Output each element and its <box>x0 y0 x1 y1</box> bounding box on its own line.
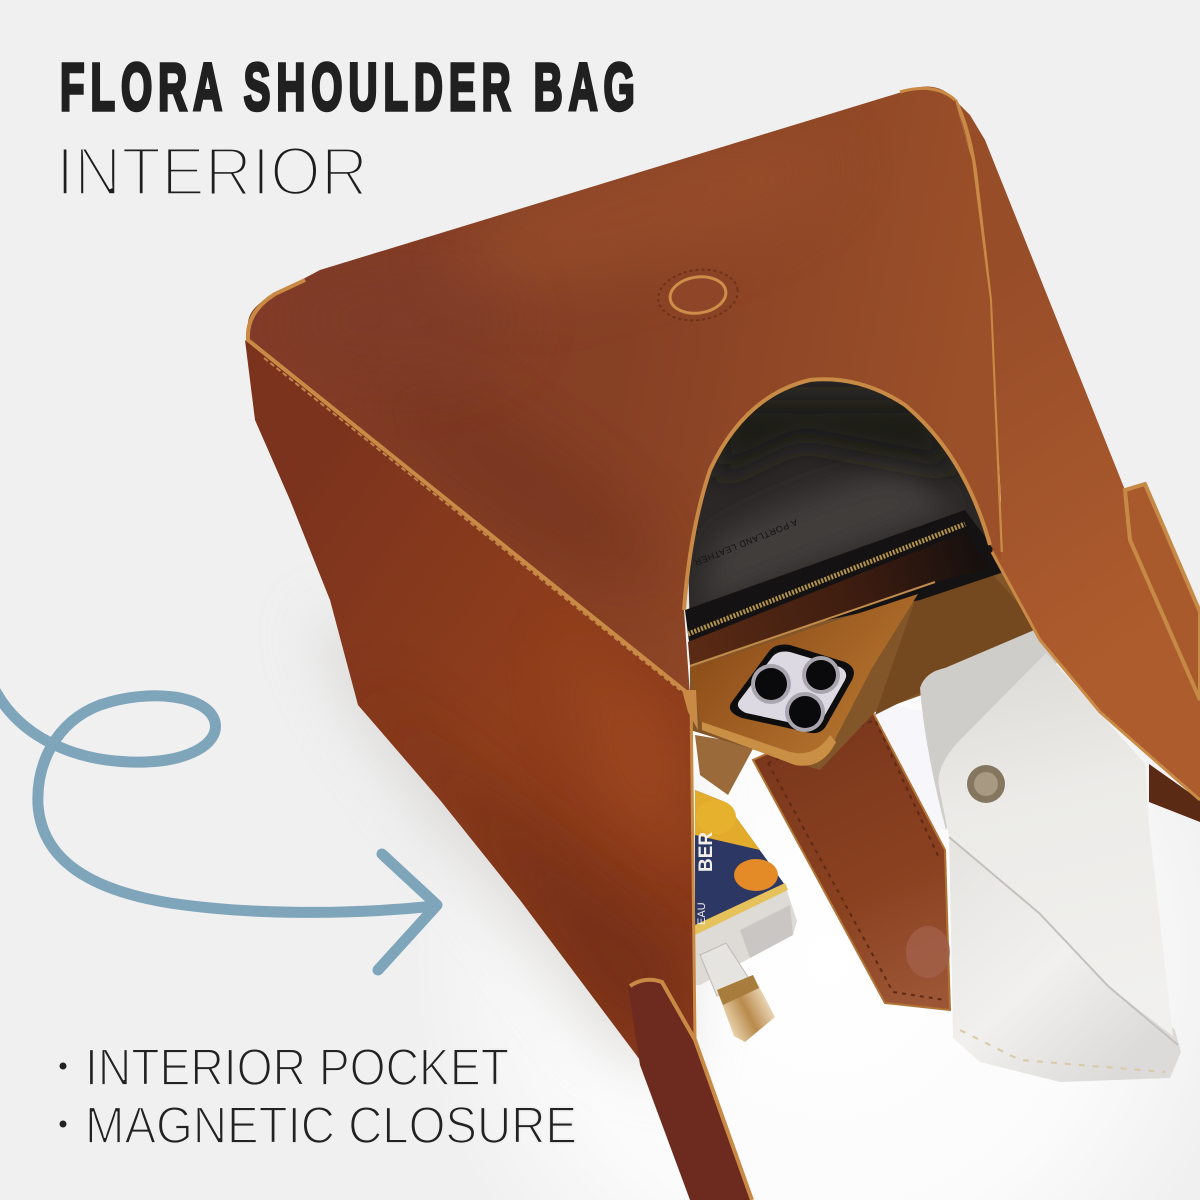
feature list <box>60 1039 577 1155</box>
shaded lining at right <box>875 565 1045 715</box>
pouch stitching <box>960 1030 1165 1072</box>
pouch front flap <box>938 653 1173 1036</box>
left lower panel <box>245 340 696 1060</box>
pouch lower body <box>949 830 1181 1082</box>
tan lining <box>690 500 1045 770</box>
bottle neck <box>700 943 750 996</box>
bottle glass <box>695 885 797 985</box>
lower strap <box>628 979 752 1200</box>
bullet: magnetic closure: MAGNETIC CLOSURE <box>85 1097 577 1155</box>
top front panel with arch opening <box>248 86 1001 730</box>
bullet: interior pocket: INTERIOR POCKET <box>85 1039 509 1097</box>
magnet bump <box>906 926 950 978</box>
dark deep shadow <box>685 510 1010 650</box>
white paper card <box>872 700 950 830</box>
floor highlight <box>330 560 1200 1200</box>
zipper <box>688 524 965 634</box>
interior of bag <box>684 370 1045 770</box>
corner knot <box>682 690 698 730</box>
snap button <box>967 765 1005 803</box>
top panel edge <box>248 280 690 695</box>
perfume label <box>695 790 785 930</box>
pouch back fold <box>920 628 1060 830</box>
label text: BER <box>696 832 717 872</box>
tan suede lining <box>695 735 755 795</box>
leather strap tongue <box>753 707 950 1010</box>
phone in leather case <box>690 594 918 766</box>
right strap <box>1125 484 1200 700</box>
camera lenses <box>751 664 791 704</box>
right side panel <box>955 100 1200 822</box>
perfume bottle: EAU <box>696 902 708 925</box>
lining text: A PORTLAND LEATHER <box>693 517 799 568</box>
dark pocket band <box>688 532 990 666</box>
title: FLORA SHOULDER BAG <box>60 49 635 125</box>
bag shadow <box>310 620 690 1080</box>
subtitle: INTERIOR <box>56 133 368 210</box>
magnetic closure stitching <box>655 265 741 325</box>
camera module <box>730 645 854 733</box>
white leather pouch <box>920 628 1181 1082</box>
gold spray cap <box>717 975 775 1042</box>
perfume bottle <box>695 790 797 1042</box>
black inner wall <box>684 370 1000 640</box>
decorative blue arrow <box>0 692 437 970</box>
